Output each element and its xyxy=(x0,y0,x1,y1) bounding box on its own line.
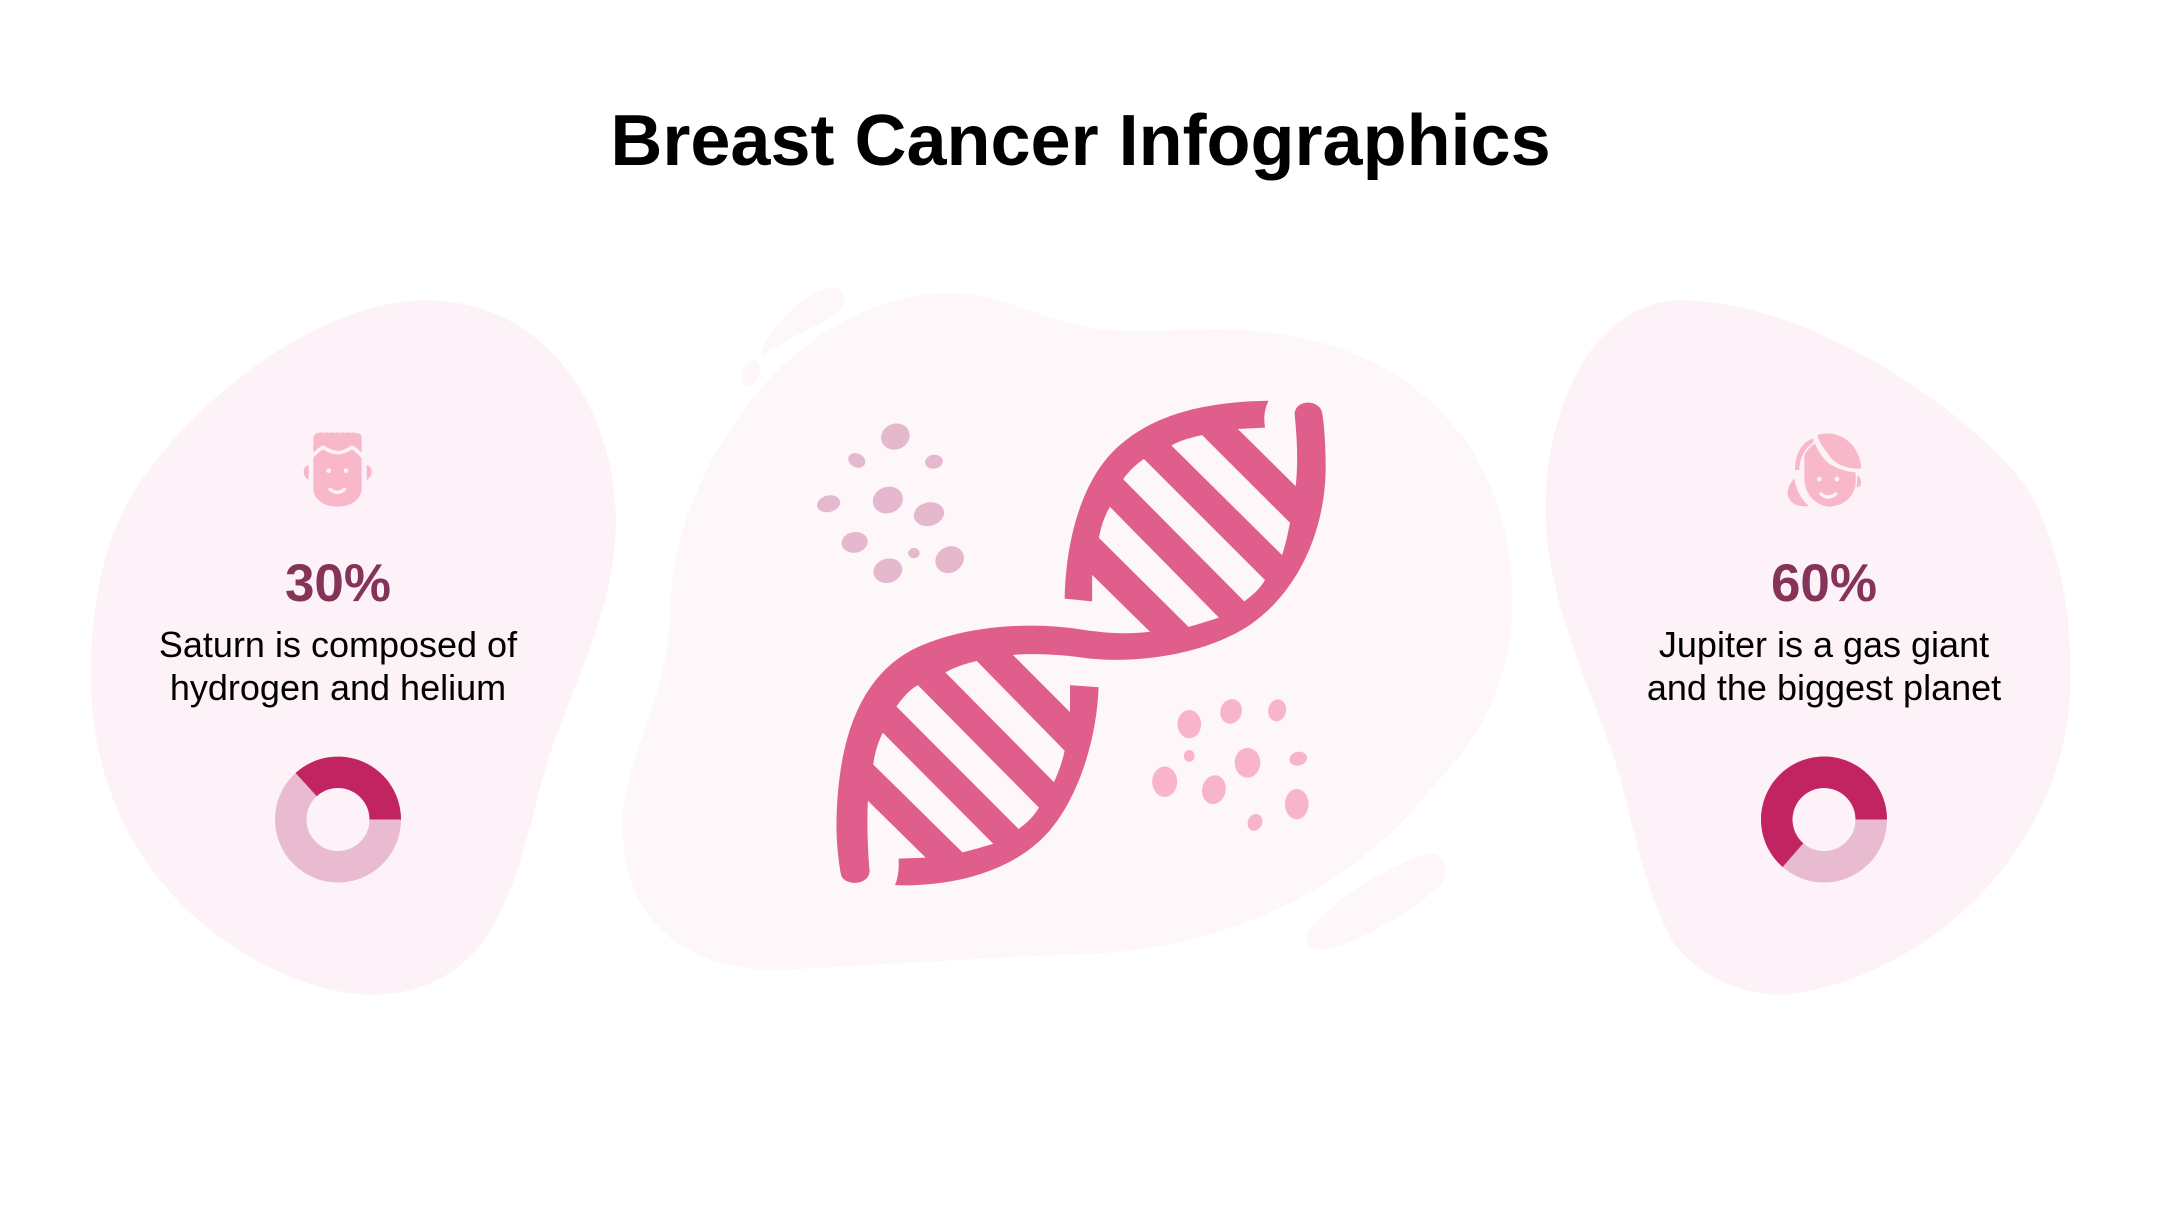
icon: DNA helix xyxy=(836,401,1326,885)
donut chart: 30% xyxy=(291,757,401,867)
text: Saturn description xyxy=(159,624,518,708)
title: Breast Cancer Infographics xyxy=(610,101,1551,181)
cell cluster: pink dots xyxy=(1152,697,1309,833)
donut chart: 60% xyxy=(1761,757,1887,867)
text: Saturn description: hydrogen and helium xyxy=(170,667,506,708)
panel: left blob xyxy=(91,300,616,995)
text: Jupiter description: Jupiter is a gas giant xyxy=(1659,624,1989,665)
stat: 60%: 60% xyxy=(1771,554,1877,613)
icon: woman face xyxy=(1788,434,1861,507)
icon: man face xyxy=(304,432,372,507)
panel: right blob xyxy=(1546,300,2071,995)
decorative blob: top left xyxy=(738,288,844,389)
text: Jupiter description xyxy=(1647,624,2001,708)
decorative blob: bottom right xyxy=(1307,854,1446,949)
text: Jupiter description: and the biggest planet xyxy=(1647,667,2001,708)
text: Saturn description: Saturn is composed of xyxy=(159,624,517,665)
stat: 30%: 30% xyxy=(285,554,391,613)
panel: centre blob xyxy=(623,293,1513,970)
cell cluster: mauve dots xyxy=(815,418,970,587)
